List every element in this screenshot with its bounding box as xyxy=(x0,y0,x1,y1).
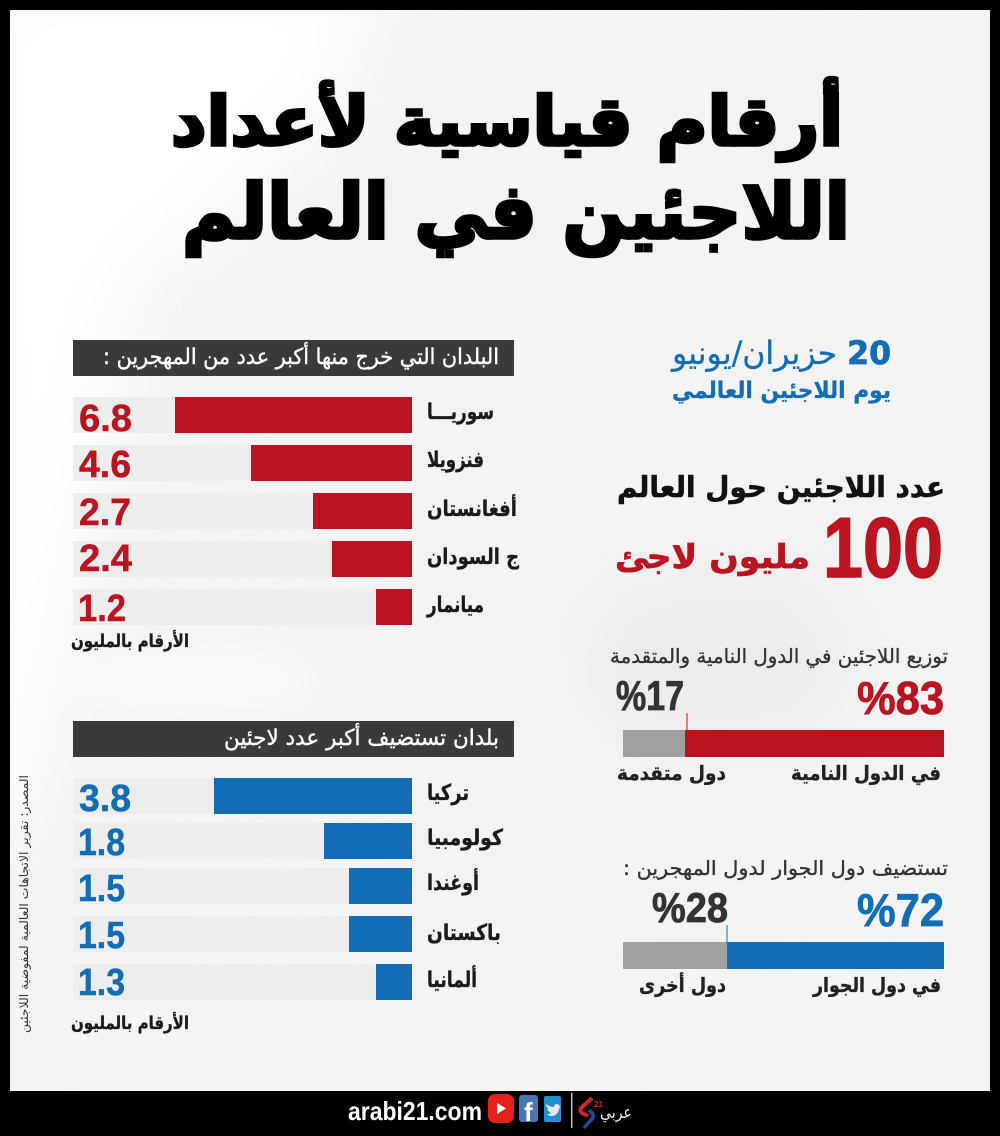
icon: facebook: f xyxy=(524,1097,533,1127)
bar row: Uganda: أوغندا xyxy=(427,867,479,896)
heading: countries of origin xyxy=(73,340,514,376)
heading: countries of origin: البلدان التي خرج منها أكبر عدد من المهجرين : xyxy=(103,342,499,370)
bar row: Afghanistan xyxy=(73,492,517,534)
footer xyxy=(348,1093,632,1128)
bar row: Myanmar: 1.2 xyxy=(78,588,126,630)
bar row: Colombia xyxy=(73,822,503,864)
split bar xyxy=(623,713,944,757)
heading: host countries xyxy=(73,721,514,757)
label: developing countries: في الدول النامية xyxy=(791,761,941,786)
divider xyxy=(571,1093,572,1128)
bar row: South Sudan: ج السودان xyxy=(427,545,519,570)
unit note: الأرقام بالمليون xyxy=(71,630,189,652)
bar row: Turkey xyxy=(73,778,469,820)
icon: twitter xyxy=(544,1096,561,1122)
logo: arabi21 xyxy=(580,1098,632,1128)
bar row: Venezuela xyxy=(73,444,484,486)
icon: youtube xyxy=(488,1094,514,1123)
bar row: Pakistan xyxy=(73,915,501,957)
date block xyxy=(670,334,891,404)
split bar xyxy=(623,925,944,969)
headline stat: 100 million refugees: 100 xyxy=(823,501,943,596)
bar row: Syria: سوريـــا xyxy=(427,400,494,425)
bar row: Uganda xyxy=(73,867,479,910)
title: أرقام قياسية لأعداد xyxy=(171,77,843,162)
bar row: Venezuela: 4.6 xyxy=(79,444,131,486)
panel: countries of origin xyxy=(71,340,519,652)
bar row: Turkey: 3.8 xyxy=(79,778,131,820)
bar row: Syria: 6.8 xyxy=(79,398,132,440)
bar row: Germany: 1.3 xyxy=(78,962,125,1004)
headline stat: 100 million refugees xyxy=(615,470,945,596)
date block: 20 حزيران/يونيو xyxy=(670,334,891,372)
label: developed countries: دول متقدمة xyxy=(617,761,726,785)
bar row: Afghanistan: 2.7 xyxy=(79,492,131,534)
heading: host countries: بلدان تستضيف أكبر عدد لاجئين xyxy=(224,723,499,751)
date block: يوم اللاجئين العالمي xyxy=(672,378,891,404)
label: other countries: دول أخرى xyxy=(639,971,726,997)
panel: neighbouring countries split xyxy=(623,856,948,998)
percentage: 28: %28 xyxy=(652,884,728,931)
bar row: Turkey: تركيا xyxy=(427,781,469,806)
bar row: Colombia: 1.8 xyxy=(78,822,125,864)
percentage: 72: %72 xyxy=(857,884,944,936)
split heading: توزيع اللاجئين في الدول النامية والمتقدمة xyxy=(610,644,948,669)
bar row: Venezuela: فنزويلا xyxy=(427,448,484,473)
panel: host countries xyxy=(71,721,514,1034)
percentage: 83: %83 xyxy=(857,672,944,724)
bar row: Afghanistan: أفغانستان xyxy=(427,493,517,522)
title xyxy=(171,77,850,257)
bar row: Pakistan: 1.5 xyxy=(78,915,125,957)
logo: arabi21: عربي xyxy=(600,1103,632,1123)
bar row: South Sudan: 2.4 xyxy=(79,538,132,580)
bar row: Syria xyxy=(73,397,494,440)
bar row: Pakistan: باكستان xyxy=(427,921,501,946)
website address: arabi21.com xyxy=(348,1096,482,1126)
bar row: Colombia: كولومبيا xyxy=(427,826,503,851)
headline stat: 100 million refugees: عدد اللاجئين حول العالم xyxy=(617,470,945,504)
bar row: Myanmar xyxy=(73,588,484,630)
headline stat: 100 million refugees: مليون لاجئ xyxy=(615,537,810,577)
icon: facebook xyxy=(519,1095,538,1127)
split heading: تستضيف دول الجوار لدول المهجرين : xyxy=(623,856,948,880)
percentage: 17: %17 xyxy=(616,672,684,719)
logo: arabi21: 21 xyxy=(594,1100,603,1109)
label: neighbouring countries: في دول الجوار xyxy=(812,973,941,998)
bar row: South Sudan xyxy=(73,538,519,580)
source note: المصدر: تقرير الاتجاهات العالمية لمفوضية اللاجئين xyxy=(17,775,32,1033)
unit note: الأرقام بالمليون xyxy=(71,1012,189,1034)
panel: developing vs developed split xyxy=(610,644,948,786)
bar row: Germany xyxy=(73,962,477,1004)
title: اللاجئين في العالم xyxy=(182,167,850,257)
bar row: Uganda: 1.5 xyxy=(78,868,125,910)
bar row: Germany: ألمانيا xyxy=(427,964,477,993)
bar row: Myanmar: ميانمار xyxy=(426,593,484,618)
